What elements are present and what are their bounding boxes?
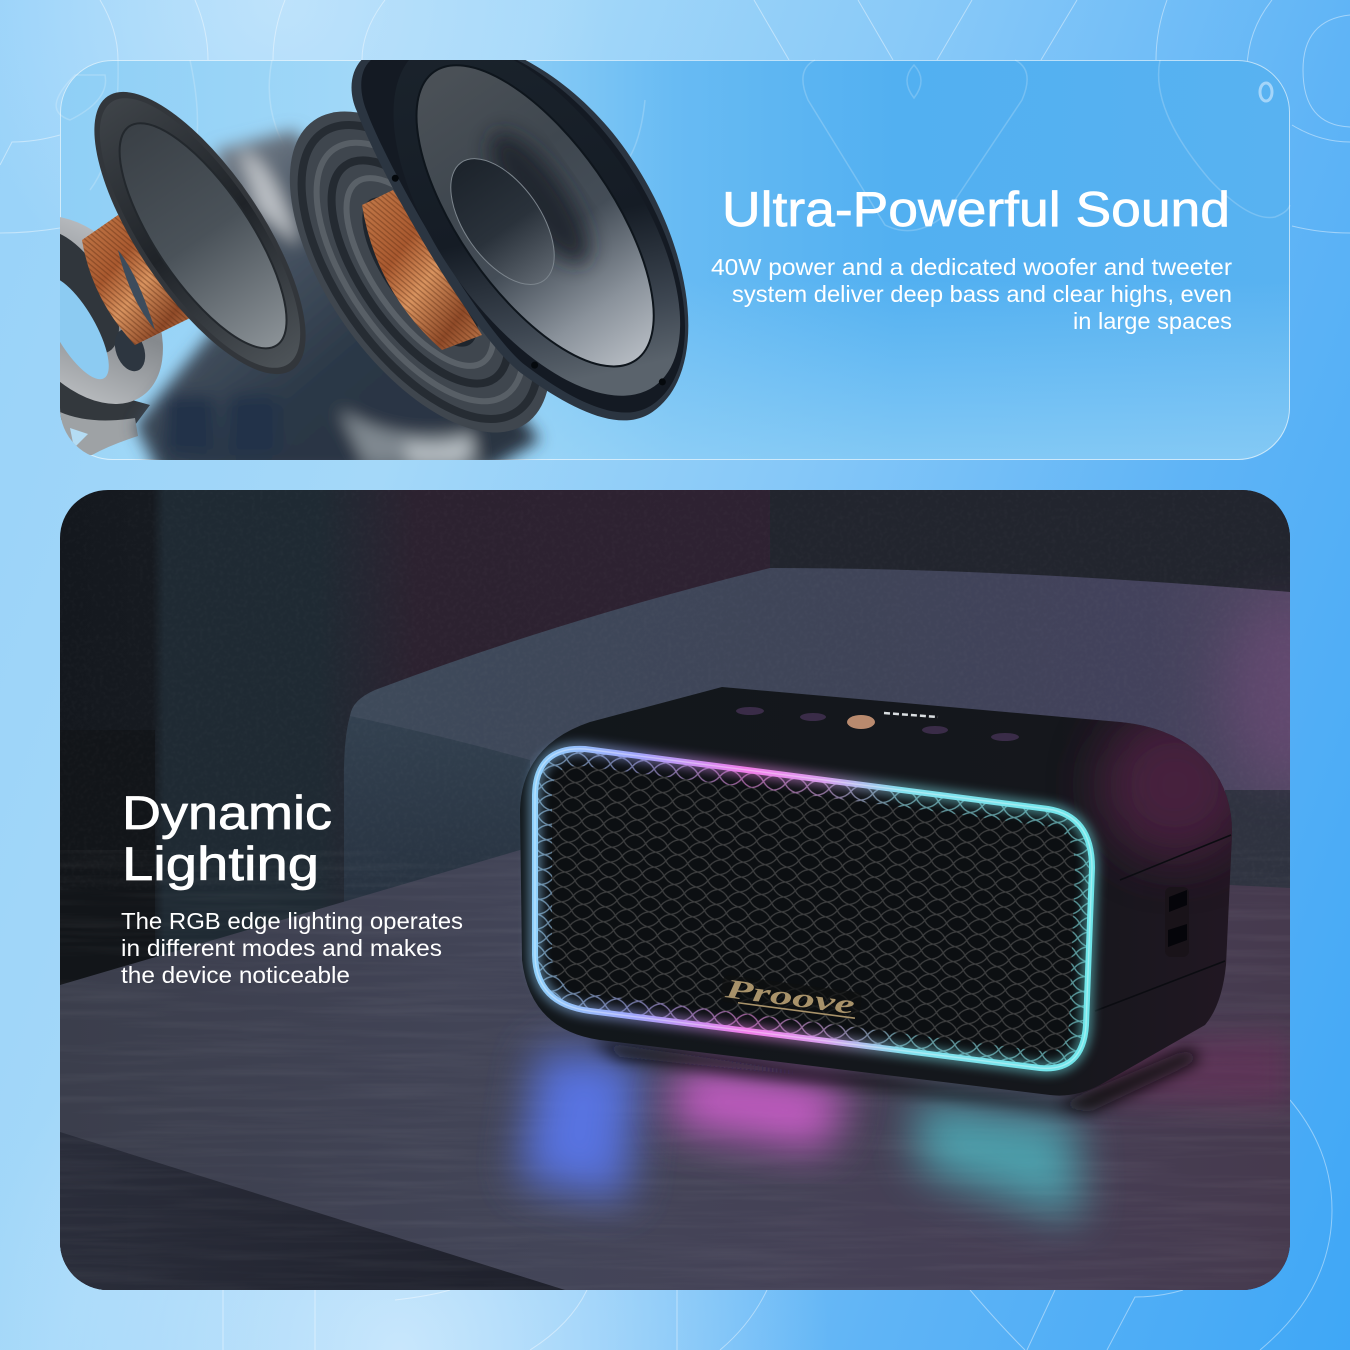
small cone <box>94 92 306 374</box>
panel: dynamic lighting <box>60 490 1345 1290</box>
speaker side seams and ports <box>1095 835 1231 1011</box>
grille <box>535 749 1092 1068</box>
panel: ultra-powerful sound <box>56 60 1290 460</box>
faint panel shapes <box>56 60 1290 231</box>
heading: dynamic lighting: Lighting <box>122 837 319 890</box>
brand logo <box>721 976 862 1019</box>
speaker body <box>520 687 1232 1096</box>
text: sound description <box>711 254 1232 334</box>
spider <box>290 112 547 432</box>
table <box>60 850 1290 1290</box>
heading: ultra-powerful sound: Ultra-Powerful Sound <box>722 183 1230 237</box>
top controls <box>736 707 1019 741</box>
large copper coil <box>362 190 482 350</box>
text: lighting description <box>121 908 463 988</box>
heading: dynamic lighting <box>122 786 332 890</box>
text: sound description: system deliver deep bass and clear highs, even <box>732 281 1232 307</box>
small copper coil <box>82 215 190 345</box>
text: sound description: 40W power and a dedicated woofer and tweeter <box>711 254 1232 280</box>
wall and back cushion <box>60 490 1290 1290</box>
magnet assembly <box>60 217 163 455</box>
heading: dynamic lighting: Dynamic <box>122 786 332 839</box>
text: sound description: in large spaces <box>1073 308 1232 334</box>
text: lighting description: The RGB edge lighting operates <box>121 908 463 934</box>
light reflection on table <box>520 1050 1080 1220</box>
coloured mesh near light ring <box>538 752 1089 1066</box>
text: lighting description: in different modes and makes <box>121 935 442 961</box>
image: exploded speaker components <box>60 60 688 460</box>
bluetooth speaker <box>520 687 1250 1112</box>
large cone <box>352 60 688 420</box>
text: lighting description: the device noticeable <box>121 962 350 988</box>
sofa <box>344 568 1290 902</box>
blurred basket <box>135 130 540 475</box>
RGB light ring <box>535 749 1092 1068</box>
brand logo: Proove <box>722 973 857 1020</box>
